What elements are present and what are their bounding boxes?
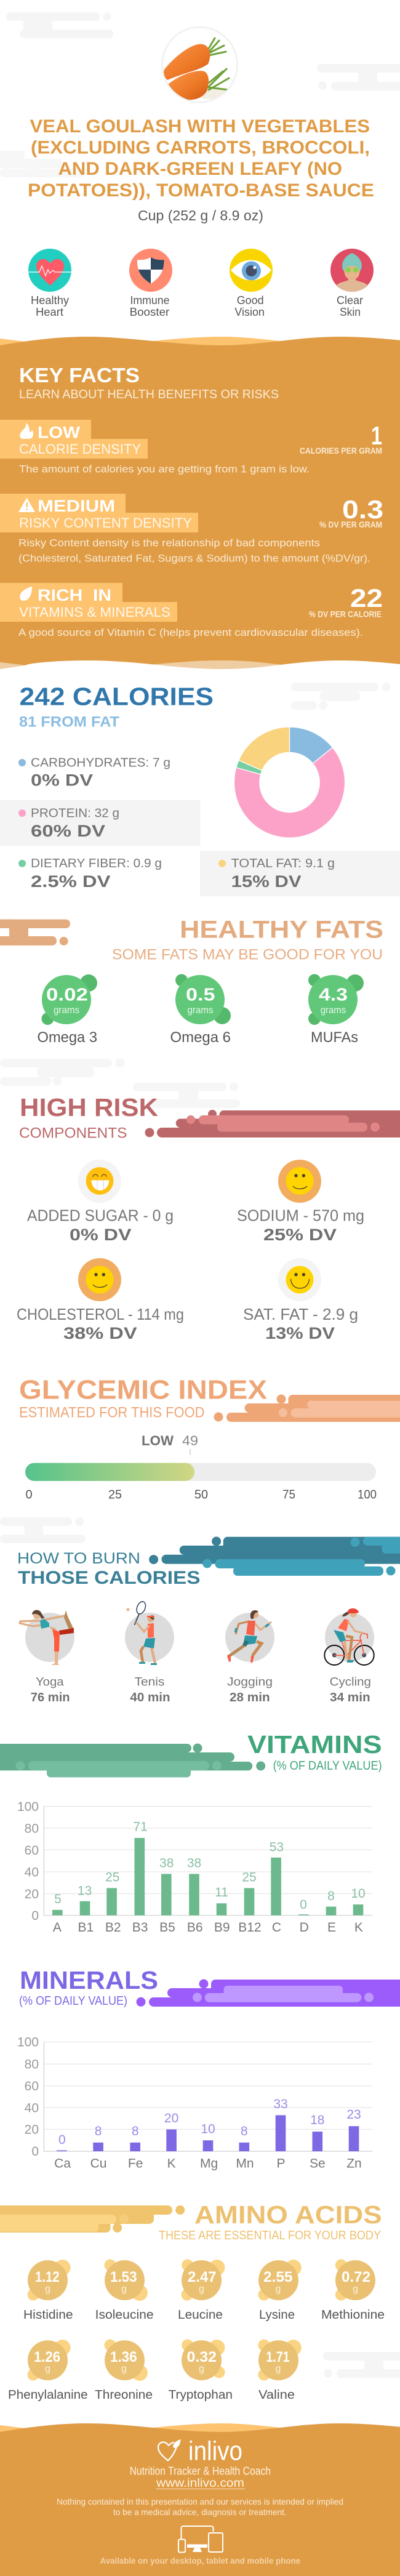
bar chart: vitamins: B12 [238, 1920, 262, 1935]
risk: saturated fat: 13% DV [265, 1324, 335, 1342]
bar chart: minerals: 0 [31, 2145, 39, 2159]
exercise: cycling: Cycling [330, 1675, 371, 1688]
bar chart: vitamins: 25 [242, 1871, 257, 1885]
fat: omega 6 [170, 974, 231, 1046]
bar chart: minerals: 8 [132, 2124, 139, 2138]
amino acid: isoleucine [95, 2259, 154, 2322]
amino acid: isoleucine: 1.53 [110, 2269, 137, 2285]
amino acid: isoleucine: g [121, 2284, 127, 2295]
bar chart: vitamins: 20 [25, 1887, 39, 1901]
bar chart: vitamins: 0 [300, 1898, 307, 1912]
amino acid: phenylalanine: g [45, 2364, 50, 2374]
amino acid: threonine: g [121, 2364, 127, 2374]
subheading: calories from fat: 81 FROM FAT [19, 714, 119, 731]
bar chart: minerals: 20 [25, 2123, 39, 2137]
subheading: key facts: LEARN ABOUT HEALTH BENEFITS OR RISKS [19, 388, 279, 401]
background cloud: above burn section [0, 1517, 86, 1543]
bar chart: minerals: Zn [346, 2157, 362, 2171]
hero image: carrots [162, 27, 238, 102]
bar chart: vitamins: B5 [159, 1920, 175, 1935]
chart: glycemic index gauge: 0 [26, 1488, 33, 1502]
tagline: Nutrition Tracker & Health Coach [130, 2465, 271, 2478]
fat: mufas: MUFAs [311, 1029, 358, 1046]
subheading: minerals percent of daily value: (% OF DAILY VALUE) [19, 1994, 127, 2008]
decoration: burn calories ribbon [149, 1536, 400, 1576]
legend: protein [0, 800, 201, 846]
amino acid: isoleucine: Isoleucine [95, 2308, 154, 2322]
fact: rich in vitamins and minerals: VITAMINS & MINERALS [19, 604, 170, 620]
exercise: tennis [125, 1600, 174, 1704]
bar chart: minerals: Fe [128, 2157, 143, 2171]
legend: total fat [200, 851, 400, 896]
amino acid: histidine: Histidine [23, 2308, 73, 2322]
background cloud: amino acids [322, 2352, 400, 2378]
fat: mufas [308, 974, 364, 1046]
disclaimer: Nothing contained in this presentation and our services is intended or implied [57, 2497, 343, 2506]
decoration: glycemic index ribbon [214, 1395, 400, 1422]
amino acid: threonine: Threonine [95, 2388, 153, 2402]
bar chart: vitamins: 13 [78, 1884, 92, 1898]
exercise: jogging: Jogging [227, 1675, 273, 1688]
bar chart: minerals: 80 [25, 2058, 39, 2072]
amino acid: tryptophan: g [199, 2364, 204, 2374]
donut chart: macronutrients [234, 727, 345, 838]
exercise: jogging [225, 1610, 274, 1704]
fact: rich in vitamins and minerals: 22 [350, 584, 383, 612]
chart: glycemic index gauge: LOW [142, 1433, 174, 1448]
bar chart: minerals: 20 [164, 2111, 178, 2125]
disclaimer: to be a medical advice, diagnosis or treatment. [113, 2507, 287, 2517]
bar chart: vitamins: 80 [25, 1822, 39, 1836]
background cloud: behind title [0, 151, 84, 177]
availability note: Available on your desktop, tablet and mobile phone [100, 2556, 300, 2566]
fat: omega 6: Omega 6 [170, 1029, 231, 1046]
amino acid: methionine [321, 2259, 385, 2322]
background cloud: calories [291, 683, 391, 710]
amino acid: phenylalanine: Phenylalanine [8, 2388, 88, 2402]
disclaimer [57, 2497, 343, 2517]
fat: omega 3 [37, 974, 97, 1046]
bar chart: vitamins: 40 [25, 1865, 39, 1880]
fact: calorie density: LOW [38, 423, 81, 442]
bar chart: vitamins: D [300, 1920, 309, 1935]
bar chart: vitamins: E [327, 1920, 336, 1935]
amino acid: histidine [23, 2260, 73, 2322]
background cloud: right of high risk [133, 1082, 240, 1108]
benefit: immune booster: Immune [130, 294, 170, 307]
fact: risky content density: (Cholesterol, Saturated Fat, Sugars & Sodium) to the amount (%DV/gr). [18, 553, 370, 564]
amino acid: histidine: 1.12 [35, 2269, 60, 2285]
amino acid: lysine [258, 2260, 302, 2322]
decoration: vitamins ribbon [0, 1743, 265, 1778]
benefit: healthy heart: Healthy [31, 294, 69, 307]
fact: calorie density: The amount of calories you are getting from 1 gram is low. [19, 463, 310, 475]
fact: rich in vitamins and minerals: A good source of Vitamin C (helps prevent cardiovascular diseases). [18, 627, 363, 638]
legend: carbohydrates: 0% DV [31, 771, 93, 790]
amino acid: histidine: g [45, 2284, 50, 2295]
title: AND DARK-GREEN LEAFY (NO [58, 159, 342, 179]
title [28, 116, 374, 201]
benefit: clear skin: Skin [340, 306, 361, 318]
bar chart: vitamins: B6 [187, 1920, 203, 1935]
benefit: good vision [230, 249, 273, 318]
risk: saturated fat: SAT. FAT - 2.9 g [243, 1305, 358, 1323]
legend: carbohydrates [18, 756, 170, 790]
bar chart: vitamins: 38 [159, 1856, 174, 1870]
heading: amino acids: AMINO ACIDS [194, 2201, 382, 2229]
bar chart: minerals: 10 [201, 2122, 215, 2137]
fat: mufas: grams [321, 1005, 346, 1016]
legend: total fat: 15% DV [231, 872, 302, 891]
benefit: healthy heart [28, 249, 71, 318]
subheading: healthy fats: SOME FATS MAY BE GOOD FOR YOU [112, 947, 383, 963]
bar chart: vitamins: B3 [132, 1920, 148, 1935]
exercise: yoga [20, 1610, 74, 1704]
benefit: immune booster: Booster [130, 306, 169, 318]
fact: calorie density: 1 [371, 421, 382, 450]
benefit: good vision: Vision [234, 306, 265, 318]
bar chart: minerals: Ca [54, 2157, 71, 2171]
bar chart: vitamins: B1 [78, 1920, 94, 1935]
bar chart: vitamins: B9 [214, 1920, 230, 1935]
amino acid: lysine: 2.55 [263, 2269, 293, 2285]
legend: carbohydrates: CARBOHYDRATES: 7 g [31, 756, 170, 770]
bar chart: vitamins: A [53, 1920, 62, 1935]
subheading: glycemic index: ESTIMATED FOR THIS FOOD [19, 1405, 204, 1421]
bar chart: minerals: K [167, 2157, 176, 2171]
amino acid: leucine: g [199, 2284, 204, 2295]
benefit: immune booster [129, 249, 172, 318]
logo wordmark: inlivo [188, 2436, 242, 2466]
benefit: good vision: Good [237, 294, 264, 307]
bar chart: vitamins [17, 1800, 372, 1935]
fat: omega 3: 0.02 [46, 985, 88, 1005]
bar chart: vitamins: 11 [215, 1885, 228, 1900]
logo: inlivo heart [158, 2439, 181, 2461]
heading: how to burn those calories: HOW TO BURN [17, 1550, 140, 1567]
fact: calorie density: CALORIE DENSITY [19, 441, 141, 457]
benefit: healthy heart: Heart [36, 306, 63, 318]
amino acid: tryptophan: 0.32 [187, 2349, 217, 2365]
decoration: high risk ribbon [145, 1110, 400, 1138]
bar chart: vitamins: 71 [133, 1820, 148, 1834]
legend: dietary fiber: DIETARY FIBER: 0.9 g [31, 857, 162, 870]
chart: glycemic index gauge: 25 [108, 1488, 122, 1502]
bar chart: minerals: 8 [95, 2124, 102, 2138]
panel: footer [0, 2423, 400, 2576]
bar chart: vitamins: 100 [17, 1800, 39, 1814]
bar chart: minerals: 23 [346, 2108, 361, 2122]
fat: omega 3: Omega 3 [37, 1029, 97, 1046]
bar chart: minerals: 8 [241, 2124, 248, 2138]
heading: glycemic index: GLYCEMIC INDEX [19, 1375, 267, 1405]
exercise: tennis: 40 min [130, 1691, 170, 1704]
bar chart: minerals: 18 [310, 2113, 324, 2127]
fact: risky content density [0, 494, 383, 564]
bar chart: minerals: 40 [25, 2101, 39, 2115]
title: POTATOES)), TOMATO-BASE SAUCE [28, 180, 374, 201]
amino acid: phenylalanine: 1.26 [34, 2349, 60, 2365]
risk: added sugar [27, 1160, 174, 1244]
bar chart: minerals: P [276, 2157, 286, 2171]
amino acid: tryptophan: Tryptophan [169, 2388, 233, 2402]
bar chart: minerals: 33 [273, 2097, 288, 2111]
risk: sodium: 25% DV [263, 1226, 337, 1244]
subheading: vitamins percent of daily value: (% OF DAILY VALUE) [273, 1759, 382, 1773]
heading: how to burn those calories [17, 1550, 201, 1588]
serving size: Cup (252 g / 8.9 oz) [138, 207, 263, 223]
bar chart: vitamins: 25 [105, 1871, 119, 1885]
bar chart: vitamins: 5 [54, 1892, 62, 1906]
fact: rich in vitamins and minerals: % DV PER CALORIE [309, 609, 382, 619]
chart: glycemic index gauge: 100 [358, 1488, 377, 1502]
bar chart: minerals: Se [310, 2157, 326, 2171]
exercise: jogging: 28 min [230, 1691, 270, 1704]
fact: risky content density: % DV PER GRAM [319, 520, 382, 529]
decoration: healthy fats ribbon [0, 920, 70, 945]
exercise: cycling [324, 1608, 374, 1704]
bar chart: vitamins: 38 [187, 1856, 201, 1870]
amino acid: leucine [178, 2259, 225, 2322]
bar chart: vitamins: 8 [327, 1889, 335, 1903]
panel: key facts [0, 337, 400, 669]
amino acid: lysine: Lysine [259, 2308, 295, 2322]
legend: protein: PROTEIN: 32 g [31, 807, 119, 821]
fact: rich in vitamins and minerals: RICH IN [38, 586, 111, 604]
bar chart: minerals: 100 [17, 2035, 39, 2050]
fat: omega 6: 0.5 [186, 985, 215, 1005]
heading: key facts: KEY FACTS [19, 364, 140, 387]
bar chart: vitamins: 10 [351, 1887, 366, 1901]
amino acid: lysine: g [276, 2284, 281, 2295]
risk: sodium [237, 1160, 364, 1244]
amino acid: methionine: g [353, 2284, 358, 2295]
background cloud: top left [6, 12, 113, 38]
fact: calorie density: CALORIES PER GRAM [300, 446, 382, 455]
decoration: minerals ribbon [137, 1980, 400, 2007]
bar chart: minerals: Cu [90, 2157, 106, 2171]
chart: glycemic index gauge: 50 [194, 1488, 208, 1502]
exercise: yoga: Yoga [36, 1675, 64, 1688]
heading: how to burn those calories: THOSE CALORIES [18, 1568, 201, 1588]
website link: www.inlivo.com [156, 2477, 244, 2490]
amino acid: methionine: 0.72 [342, 2269, 370, 2285]
amino acid: methionine: Methionine [321, 2308, 385, 2322]
heading: minerals: MINERALS [20, 1966, 158, 1994]
background cloud: left of high risk [0, 1059, 124, 1086]
heading: calories: 242 CALORIES [20, 683, 214, 711]
amino acid: valine: g [276, 2364, 281, 2374]
bar chart: minerals: 60 [25, 2079, 39, 2093]
bar chart: vitamins: 53 [270, 1840, 284, 1854]
fact: risky content density: RISKY CONTENT DENSITY [19, 515, 192, 531]
bar chart: minerals: Mg [200, 2157, 218, 2171]
exercise: tennis: Tenis [134, 1675, 164, 1688]
fact: risky content density: MEDIUM [38, 497, 115, 515]
risk: cholesterol: 38% DV [63, 1324, 137, 1342]
fat: mufas: 4.3 [319, 985, 348, 1005]
amino acid: tryptophan [169, 2339, 233, 2402]
background cloud: top right [317, 64, 400, 90]
chart: glycemic index gauge [25, 1433, 377, 1502]
bar chart: vitamins: C [272, 1920, 281, 1935]
risk: added sugar: ADDED SUGAR - 0 g [27, 1206, 174, 1225]
fact: risky content density: 0.3 [342, 495, 383, 524]
risk: cholesterol: CHOLESTEROL - 114 mg [17, 1305, 184, 1323]
bar chart: minerals: 0 [58, 2133, 66, 2147]
exercise: yoga: 76 min [31, 1691, 70, 1704]
fact: risky content density: Risky Content density is the relationship of bad components [18, 537, 320, 549]
legend: dietary fiber [18, 857, 162, 891]
heading: healthy fats: HEALTHY FATS [180, 917, 383, 944]
amino acid: valine: Valine [258, 2388, 295, 2402]
legend: total fat: TOTAL FAT: 9.1 g [231, 857, 335, 870]
title: (EXCLUDING CARROTS, BROCCOLI, [31, 138, 370, 158]
exercise: cycling: 34 min [330, 1691, 370, 1704]
legend: protein: 60% DV [31, 822, 105, 840]
heading: high risk: HIGH RISK [20, 1093, 158, 1121]
fat: omega 6: grams [187, 1005, 213, 1016]
subheading: amino acids: THESE ARE ESSENTIAL FOR YOUR BODY [159, 2229, 381, 2242]
fact: rich in vitamins and minerals [0, 583, 383, 638]
amino acid: threonine: 1.36 [110, 2349, 137, 2365]
fat: omega 3: grams [54, 1005, 79, 1016]
risk: sodium: SODIUM - 570 mg [237, 1206, 364, 1225]
benefit: clear skin [330, 249, 374, 318]
risk: added sugar: 0% DV [70, 1226, 132, 1244]
legend: dietary fiber: 2.5% DV [31, 872, 111, 891]
amino acid: valine [258, 2339, 302, 2402]
title: VEAL GOULASH WITH VEGETABLES [30, 116, 370, 137]
amino acid: leucine: Leucine [178, 2308, 223, 2322]
risk: cholesterol [17, 1258, 184, 1342]
bar chart: vitamins: K [354, 1920, 363, 1935]
amino acid: threonine [95, 2339, 153, 2402]
amino acid: valine: 1.71 [266, 2349, 290, 2365]
bar chart: minerals: Mn [236, 2157, 254, 2171]
amino acid: leucine: 2.47 [188, 2269, 217, 2285]
chart: glycemic index gauge: 49 [182, 1433, 198, 1448]
chart: glycemic index gauge: 75 [282, 1488, 295, 1502]
bar chart: minerals [17, 2035, 372, 2171]
heading: vitamins: VITAMINS [247, 1730, 382, 1759]
bar chart: vitamins: B2 [105, 1920, 121, 1935]
subheading: components: COMPONENTS [19, 1125, 127, 1142]
bar chart: vitamins: 0 [31, 1909, 39, 1923]
icon: devices [178, 2526, 223, 2552]
bar chart: vitamins: 60 [25, 1844, 39, 1858]
decoration: amino acids ribbon [0, 2205, 185, 2233]
benefit: clear skin: Clear [337, 294, 363, 307]
amino acid: phenylalanine [8, 2340, 88, 2402]
fact: calorie density [0, 420, 382, 475]
risk: saturated fat [243, 1258, 358, 1342]
